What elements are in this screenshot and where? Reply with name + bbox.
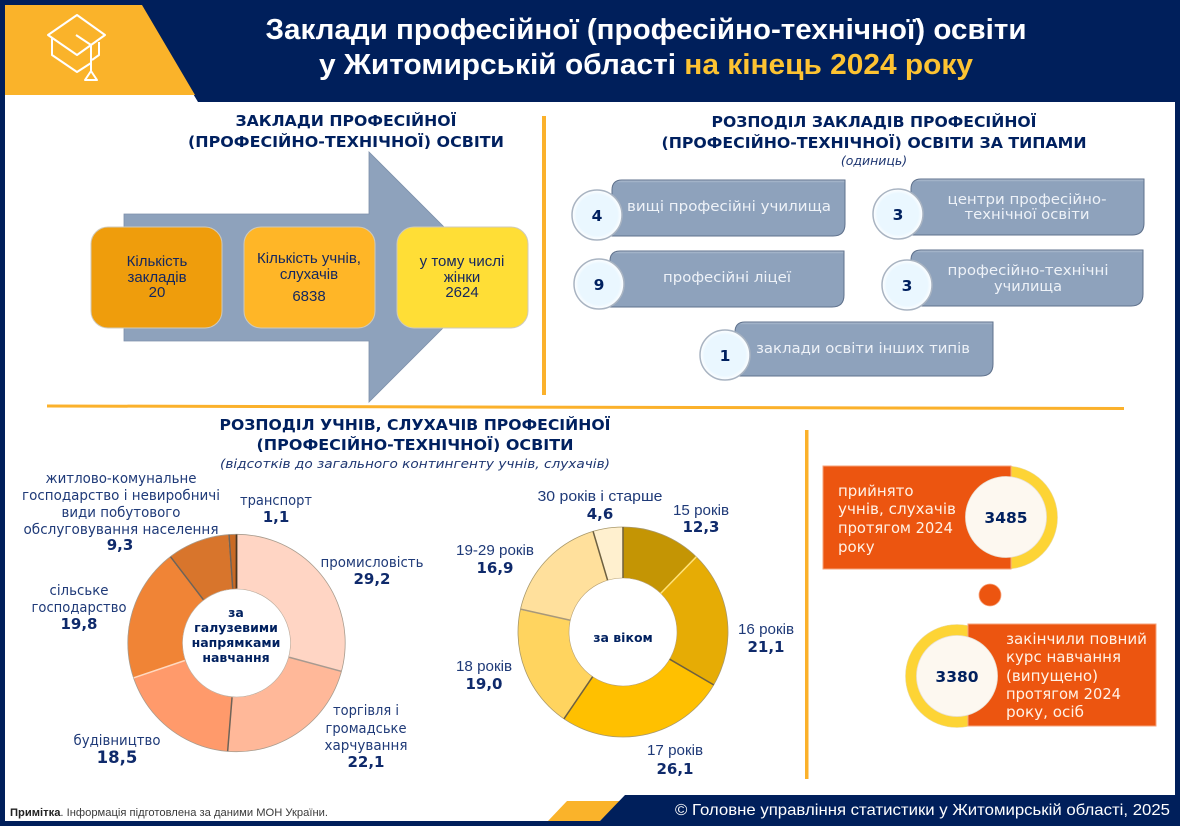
heading: institutions [188,111,504,151]
panel: institutions [91,111,528,402]
label: trade: торгівля і [333,703,399,719]
donut centre label: галузевими [194,620,278,635]
label: age 18: 18 років [456,658,512,675]
label: trade [324,703,408,771]
item: vocational colleges [572,180,845,240]
card: institutions count: закладів [127,269,187,286]
label: transport: 1,1 [263,508,289,526]
card: students count [244,227,375,328]
heading: student distribution: РОЗПОДІЛ УЧНІВ, СЛУХАЧІВ ПРОФЕСІЙНОЇ [220,415,611,434]
label: agriculture [32,583,126,633]
header orange tab [5,5,195,95]
card: women count [397,227,528,328]
donut centre label: навчання [202,650,270,665]
callout: graduated: року, осіб [1006,703,1084,721]
label: agriculture: 19,8 [60,615,98,633]
card: students count: слухачів [280,266,338,283]
label: industry: промисловість [320,555,424,571]
item: other institutions: 1 [720,347,730,365]
icon: graduation cap [48,15,105,80]
callout: graduated: протягом 2024 [1006,685,1121,703]
heading: types: РОЗПОДІЛ ЗАКЛАДІВ ПРОФЕСІЙНОЇ [712,112,1037,131]
label: trade: громадське [326,721,406,737]
item: vocational schools: професійно-технічні [948,263,1108,279]
callout: graduated: курс навчання [1006,648,1121,666]
card: students count: Кількість учнів, [257,250,361,267]
label: agriculture: господарство [32,600,126,616]
label: age 16 [738,621,794,656]
item: lyceums: професійні ліцеї [663,270,792,286]
label: age 19-29: 19-29 років [456,542,534,559]
heading: student distribution [220,415,611,471]
label: age 15: 15 років [673,502,729,519]
label: age 18: 19,0 [465,675,503,693]
title: Заклади професійної (професійно-технічної) освіти [266,14,1026,46]
item: other institutions [700,322,993,380]
divider horizontal [47,404,1124,410]
panel: institution types [572,112,1144,380]
item: vocational schools [882,250,1143,310]
callout: admitted [823,466,1058,569]
title: у Житомирській області на кінець 2024 року [319,49,973,81]
label: age 17 [647,742,703,778]
item: other institutions: заклади освіти інших типів [756,341,970,357]
item: vocational centres: 3 [893,206,903,224]
heading: student distribution: (відсотків до загального контингенту учнів, слухачів) [220,456,610,471]
callout: admitted: 3485 [984,509,1028,527]
donut centre label: за [228,605,244,620]
callout: admitted: протягом 2024 [838,519,953,537]
card: institutions count: 20 [149,284,165,301]
label: 30 and older: 30 років і старше [538,488,662,505]
panel: admitted and graduated [823,466,1156,728]
label: transport [240,493,312,526]
label: construction: 18,5 [97,748,137,767]
callout: admitted: прийнято [838,482,914,500]
arrow [124,152,494,402]
label: age 15 [673,502,729,536]
divider vertical top [542,116,546,395]
item: vocational centres: технічної освіти [964,207,1090,223]
item: vocational colleges: вищі професійні училища [627,199,831,215]
callout: graduated [906,624,1156,728]
label: construction [74,733,160,767]
label: age 17: 17 років [647,742,703,759]
heading: student distribution: (ПРОФЕСІЙНО-ТЕХНІЧНОЇ) ОСВІТИ [256,435,574,454]
label: age 17: 26,1 [656,760,694,778]
label: housing services: види побутового [62,505,180,521]
callout: graduated: (випущено) [1006,667,1098,685]
item: lyceums [574,251,844,309]
item: vocational schools: 3 [902,277,912,295]
label: housing services: господарство і невиробничі [22,488,220,504]
label: trade: 22,1 [347,753,385,771]
card: students count: 6838 [292,288,326,305]
heading: institutions: ЗАКЛАДИ ПРОФЕСІЙНОЇ [236,111,457,130]
card: women count: 2624 [445,284,479,301]
label: housing services [22,471,220,554]
label: transport: транспорт [240,493,312,509]
title [266,14,1026,81]
label: age 19-29 [456,542,534,577]
label: construction: будівництво [74,733,160,749]
callout: admitted: учнів, слухачів [838,500,956,518]
item: vocational centres [873,179,1144,239]
label: age 15: 12,3 [682,518,720,536]
donut centre label [192,605,280,665]
label: age 19-29: 16,9 [476,559,514,577]
item: vocational colleges: 4 [592,207,603,225]
card: institutions count: Кількість [127,253,188,270]
label: age 18 [456,658,512,693]
chart: donut by field of study [22,471,424,771]
card: women count: у тому числі [420,253,504,270]
item: lyceums: 9 [594,276,604,294]
heading: types: (одиниць) [841,153,907,168]
item: vocational centres: центри професійно- [948,192,1106,208]
item: vocational schools: училища [994,279,1062,295]
card: institutions count [91,227,222,328]
label: age 16: 21,1 [747,638,785,656]
donut centre label: напрямками [192,635,280,650]
label: age 16: 16 років [738,621,794,638]
card: women count: жінки [444,269,480,286]
callout: admitted: року [838,538,875,556]
footer band [0,795,1180,826]
label: housing services: житлово-комунальне [46,471,196,487]
label: trade: харчування [324,738,408,754]
label: agriculture: сільське [50,583,108,599]
footer note: Примітка. Інформація підготовлена за даними МОН України. [10,807,328,819]
heading: types [662,112,1086,168]
label: 30 and older [538,488,662,523]
copyright: © Головне управління статистики у Житомирській області, 2025 [675,802,1170,819]
heading: types: (ПРОФЕСІЙНО-ТЕХНІЧНОЇ) ОСВІТИ ЗА ТИПАМИ [662,133,1086,152]
callout: graduated: закінчили повний [1006,630,1147,648]
label: 30 and older: 4,6 [587,505,613,523]
label: housing services: обслуговування населення [24,522,218,538]
chart: donut by age [456,488,794,778]
header band [0,0,1180,102]
connector dot [979,584,1001,606]
callout: graduated: 3380 [935,668,979,686]
label: industry [320,555,424,588]
label: housing services: 9,3 [107,536,133,554]
divider vertical bottom [805,430,808,779]
label: industry: 29,2 [353,570,391,588]
donut centre label: за віком [593,630,653,645]
heading: institutions: (ПРОФЕСІЙНО-ТЕХНІЧНОЇ) ОСВІТИ [188,132,504,151]
